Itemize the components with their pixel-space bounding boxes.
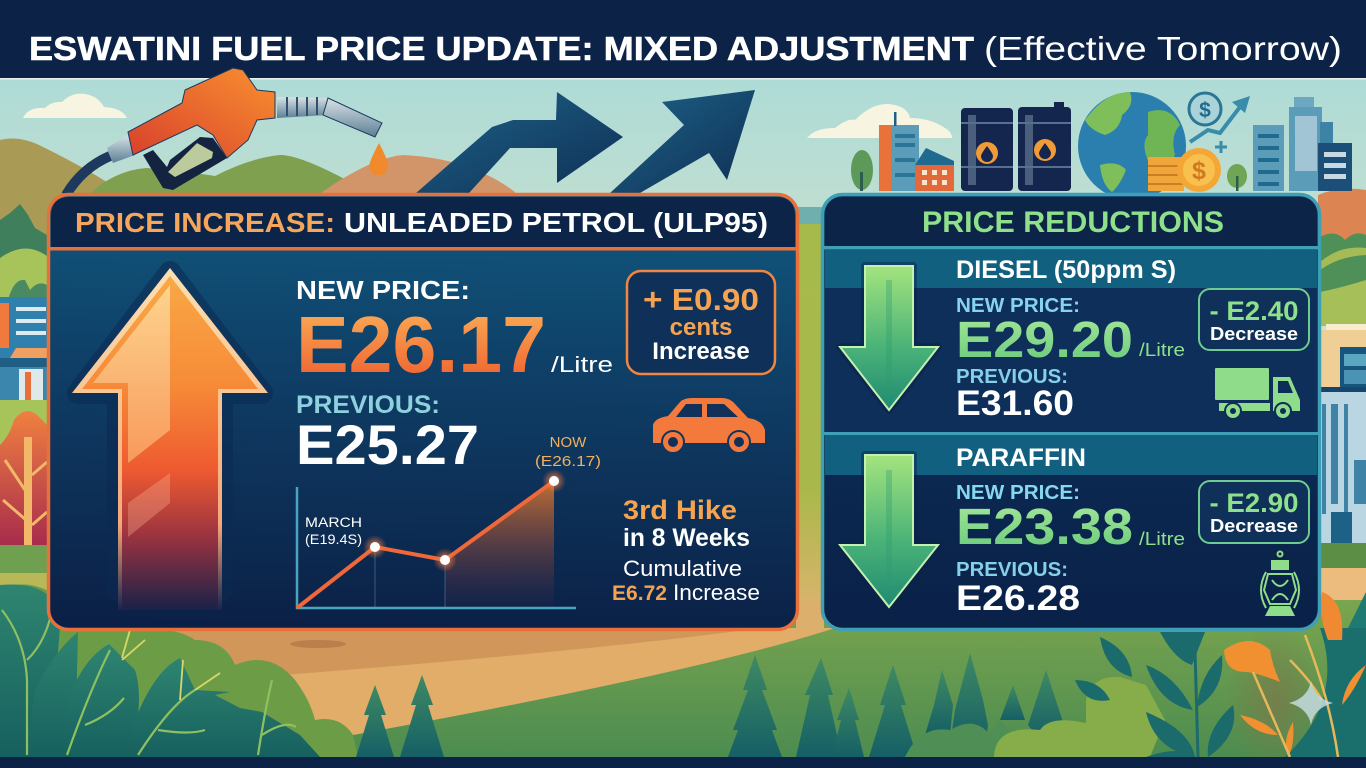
section: paraffin: PREVIOUS: <box>956 559 1068 581</box>
heading: price reductions: PRICE REDUCTIONS <box>922 206 1224 239</box>
icon: lantern <box>1261 552 1299 616</box>
line chart <box>297 434 601 608</box>
icon: fuel drop <box>369 143 388 176</box>
callout: diesel decrease: Decrease <box>1210 324 1298 344</box>
callout: increase amount <box>627 271 775 374</box>
icon: coins: $ <box>1192 157 1206 185</box>
callout: paraffin decrease: - E2.90 <box>1210 488 1298 518</box>
line chart: (E26.17) <box>535 453 601 470</box>
stat: third hike: 3rd Hike <box>623 495 737 525</box>
title text: ESWATINI FUEL PRICE UPDATE: MIXED ADJUSTMENT <box>29 30 974 67</box>
per litre unit: /Litre <box>551 352 613 377</box>
section: diesel <box>840 256 1309 423</box>
left edge scenery <box>0 190 47 603</box>
icon: globe <box>1078 92 1186 200</box>
skyline cluster top right <box>807 92 1352 200</box>
icon: car <box>653 398 765 453</box>
previous value: E25.27 <box>296 413 479 476</box>
bottom bar <box>0 757 1366 768</box>
callout: diesel decrease <box>1199 289 1309 350</box>
callout: diesel decrease: - E2.40 <box>1210 296 1298 326</box>
cloud left <box>23 94 127 118</box>
callout: paraffin decrease <box>1199 481 1309 543</box>
stat: third hike <box>612 495 760 605</box>
icon: truck <box>1215 368 1300 419</box>
section: diesel: E31.60 <box>956 384 1074 423</box>
sparkle watermark <box>1289 681 1333 725</box>
panel: price reductions <box>822 194 1320 630</box>
section: diesel: PREVIOUS: <box>956 366 1068 388</box>
section: paraffin: E23.38 <box>956 498 1133 555</box>
line chart: NOW <box>550 434 587 451</box>
stat: third hike: Increase <box>673 580 760 605</box>
section: diesel: /Litre <box>1139 340 1185 360</box>
icon: down arrow paraffin <box>840 455 938 607</box>
previous label: PREVIOUS: <box>296 391 440 419</box>
section: paraffin <box>840 444 1309 618</box>
icon: coins <box>1148 148 1221 192</box>
section: paraffin: E26.28 <box>956 579 1080 618</box>
panel header <box>825 197 1317 246</box>
new price label: NEW PRICE: <box>296 275 470 305</box>
icon: fuel nozzle <box>66 68 388 195</box>
title band <box>0 0 1366 78</box>
section: paraffin: PARAFFIN <box>956 444 1086 472</box>
section: paraffin: /Litre <box>1139 529 1185 549</box>
foliage bottom right <box>905 592 1366 768</box>
section: diesel: E29.20 <box>956 311 1133 368</box>
icon: down arrow diesel <box>840 266 938 410</box>
arrows behind panel <box>416 90 755 193</box>
icon: oil barrels <box>961 102 1071 191</box>
stat: third hike: Cumulative <box>623 556 742 581</box>
heading: price increase: PRICE INCREASE: <box>75 207 335 238</box>
section: diesel: NEW PRICE: <box>956 295 1080 317</box>
title qualifier: (Effective Tomorrow) <box>984 30 1342 67</box>
section: diesel: DIESEL (50ppm S) <box>956 256 1176 284</box>
section: paraffin: NEW PRICE: <box>956 482 1080 504</box>
trees bottom <box>356 653 1064 757</box>
cloud <box>807 104 952 138</box>
panel: price increase unleaded petrol <box>48 194 798 630</box>
gap scenery between panels <box>796 207 824 225</box>
line chart: (E19.4S) <box>305 531 362 547</box>
heading: unleaded petrol: UNLEADED PETROL (ULP95) <box>344 207 768 238</box>
stat: third hike: in 8 Weeks <box>623 524 750 552</box>
callout: increase amount: + E0.90 <box>643 282 759 317</box>
callout: increase amount: Increase <box>652 338 750 365</box>
big up arrow <box>72 268 268 610</box>
new price value: E26.17 <box>296 300 546 389</box>
foliage bottom left <box>0 584 358 757</box>
callout: increase amount: cents <box>670 314 732 341</box>
stat: third hike: E6.72 <box>612 582 667 605</box>
hills behind nozzle <box>0 139 127 240</box>
ground <box>0 600 1366 758</box>
icon: dollar trend: $ <box>1199 99 1211 122</box>
icon: dollar trend <box>1189 93 1250 153</box>
right edge scenery <box>1318 189 1366 602</box>
line chart: MARCH <box>305 514 362 530</box>
callout: paraffin decrease: Decrease <box>1210 516 1298 536</box>
panel header <box>51 197 795 247</box>
